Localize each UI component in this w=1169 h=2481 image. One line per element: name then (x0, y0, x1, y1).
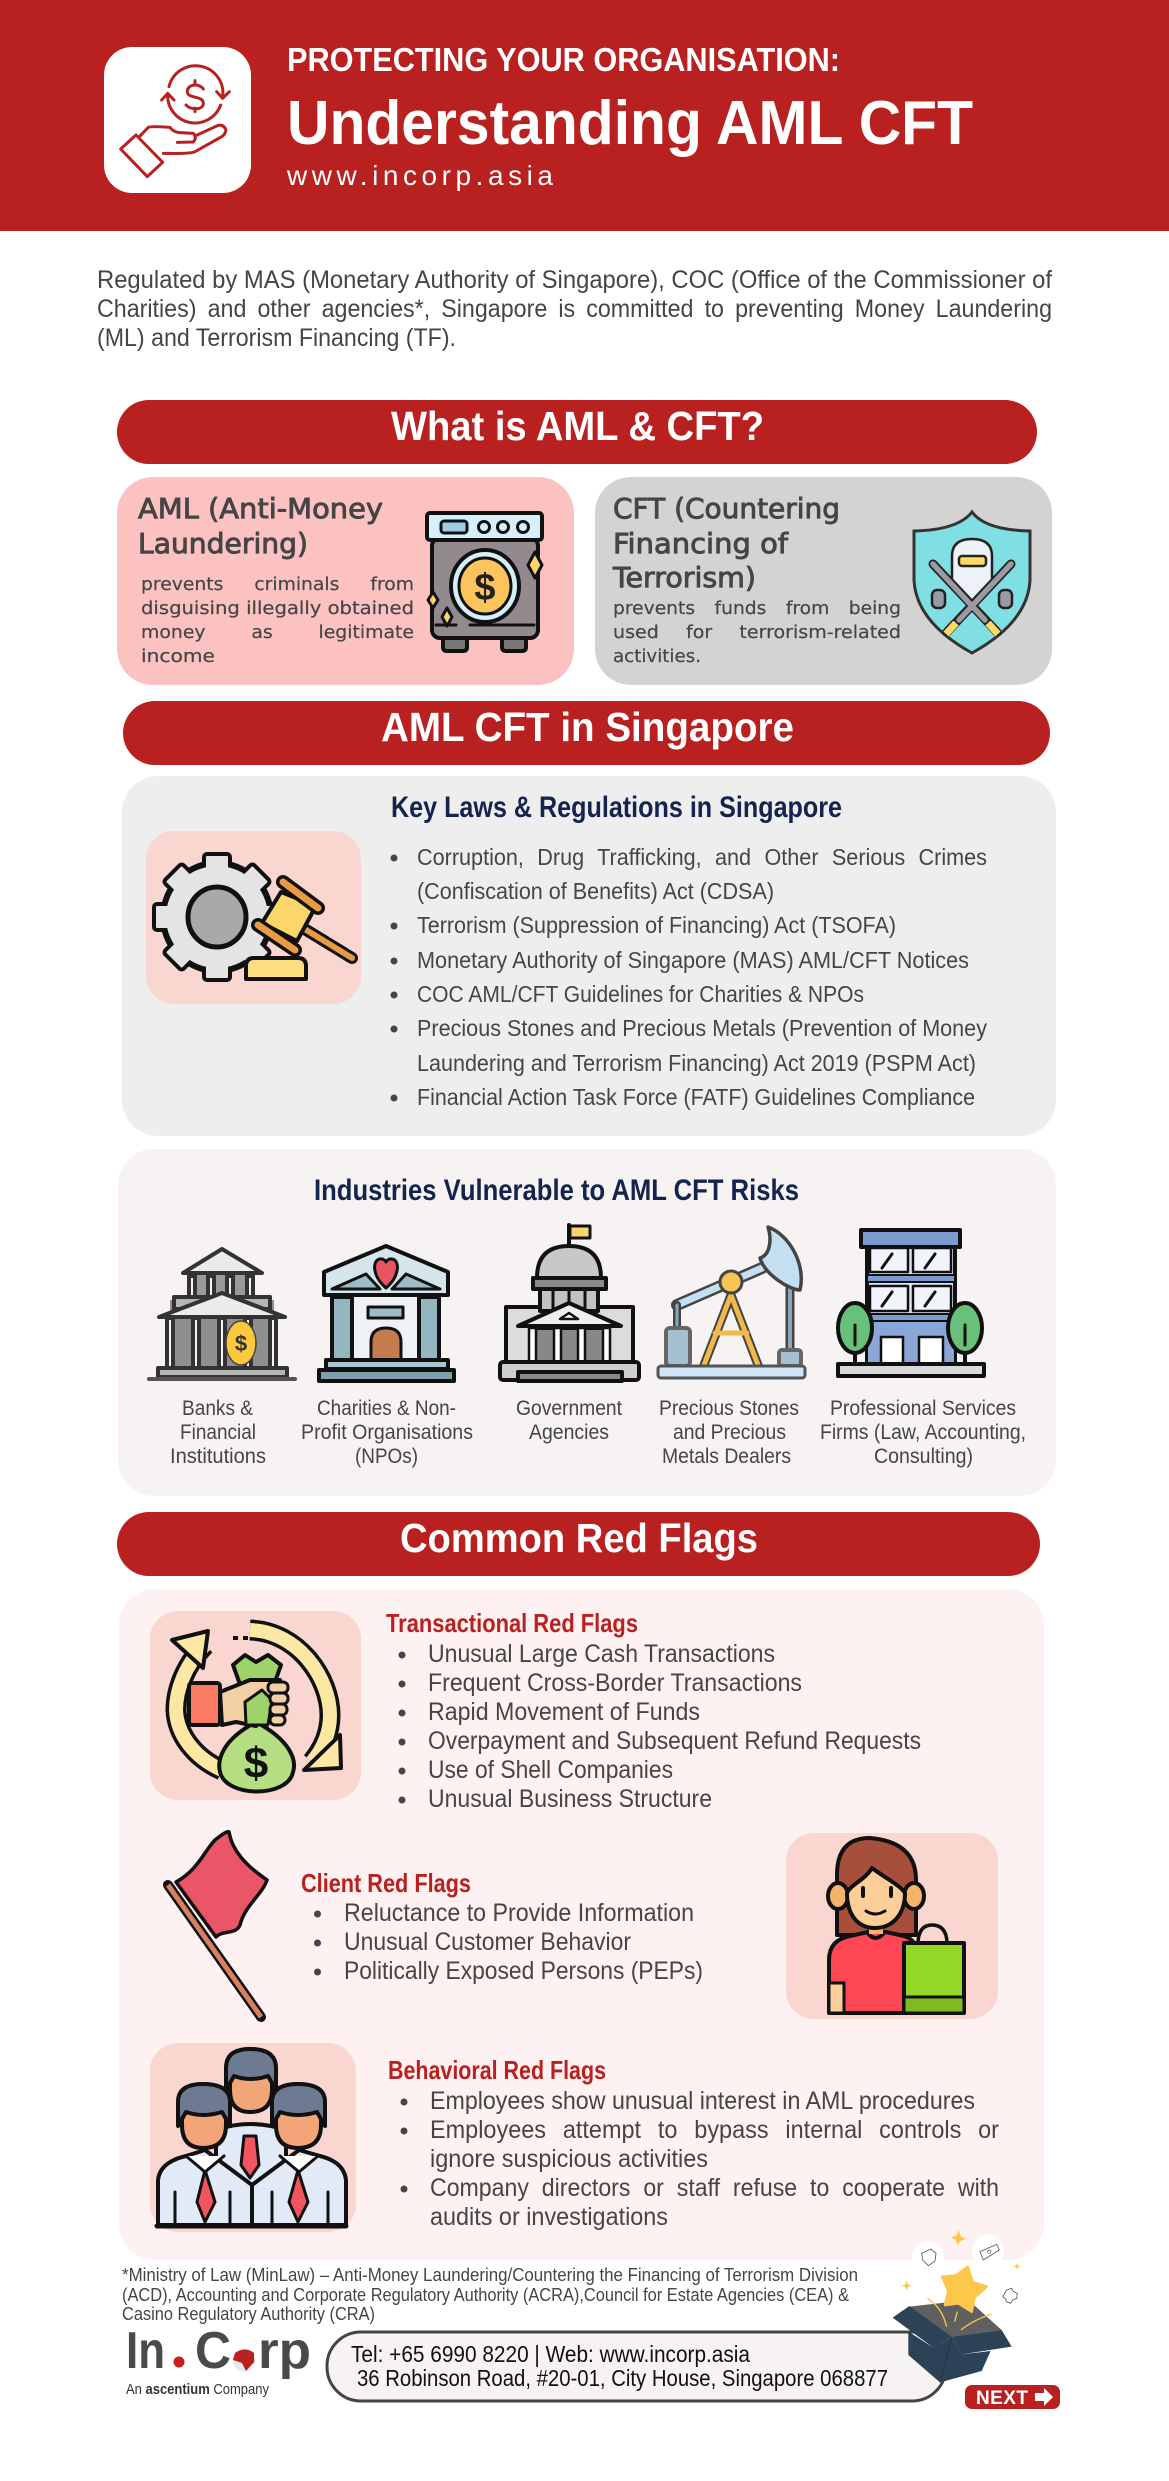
footnote (122, 2265, 858, 2324)
label: precious stones (659, 1397, 799, 1468)
icon: client with shopping bag (786, 1833, 998, 2019)
icon: money bag with arrows: $ (244, 1739, 268, 1788)
panel: key laws and regulations (122, 776, 1056, 1136)
icon: oil pump (658, 1227, 805, 1378)
AML description: income (141, 646, 215, 667)
bullet list: laws: Terrorism (Suppression of Financing) Act (TSOFA) (417, 912, 896, 938)
label: government (516, 1397, 622, 1444)
bullet list: client: Reluctance to Provide Information (344, 1899, 694, 1927)
label: government: Agencies (529, 1421, 609, 1444)
transactional red flags (386, 1608, 921, 1813)
icon: team of employees (150, 2043, 356, 2232)
bullet list: transactional: Frequent Cross-Border Transactions (428, 1669, 802, 1697)
header kicker: PROTECTING YOUR ORGANISATION: (287, 41, 840, 78)
bullet list: laws (390, 844, 987, 1110)
heading: Common Red Flags: Common Red Flags (400, 1515, 758, 1561)
label: banks (170, 1397, 266, 1468)
footnote: (ACD), Accounting and Corporate Regulatory Authority (ACRA),Council for Estate Agencies (CEA) & (122, 2285, 849, 2305)
icon: money bag with arrows (150, 1611, 361, 1800)
icon: globe (232, 2348, 256, 2372)
label: government: Government (516, 1397, 622, 1420)
heading: AML CFT in Singapore (123, 701, 1050, 765)
label: banks: Financial (180, 1421, 256, 1444)
AML description: prevents criminals from (141, 574, 414, 595)
website: www.incorp.asia (286, 160, 553, 191)
bullet list: behavioral: ignore suspicious activities (430, 2145, 708, 2173)
CFT description (613, 598, 901, 667)
bullet list: client: Politically Exposed Persons (PEPs) (344, 1957, 703, 1985)
bullet list: laws: COC AML/CFT Guidelines for Charities & NPOs (417, 981, 864, 1007)
industry labels (170, 1397, 1026, 1468)
bullet list: transactional: Rapid Movement of Funds (428, 1698, 700, 1726)
heading: AML CFT in Singapore: AML CFT in Singapore (381, 704, 794, 750)
heading: What is AML & CFT: What is AML & CFT? (391, 403, 764, 449)
icon: washing machine with dollar (427, 513, 542, 651)
CFT title: CFT (Countering (613, 493, 840, 525)
bullet list: behavioral: Employees show unusual interest in AML procedures (430, 2087, 975, 2115)
next button (965, 2385, 1060, 2409)
panel: vulnerable industries (118, 1149, 1056, 1496)
client red flags: Client Red Flags (301, 1868, 471, 1898)
main title: Understanding AML CFT (287, 89, 973, 158)
label: professional services: Professional Services (830, 1397, 1016, 1420)
bullet list: laws: Financial Action Task Force (FATF) Guidelines Compliance (417, 1084, 975, 1110)
bullet list: behavioral: Company directors or staff refuse to cooperate with (430, 2174, 999, 2202)
bullet list: transactional: Unusual Large Cash Transactions (428, 1640, 775, 1668)
label: professional services: Consulting) (874, 1445, 973, 1468)
label: precious stones: Precious Stones (659, 1397, 799, 1420)
bullet list: transactional: Overpayment and Subsequent Refund Requests (428, 1727, 921, 1755)
icon: washing machine with dollar: $ (474, 567, 496, 609)
contact details: 36 Robinson Road, #20-01, City House, Singapore 068877 (357, 2365, 888, 2391)
label: banks: Institutions (170, 1445, 266, 1468)
panel: CFT definition (595, 477, 1052, 685)
icon: bank: $ (235, 1331, 247, 1356)
bullet list: laws: Monetary Authority of Singapore (MAS) AML/CFT Notices (417, 947, 969, 973)
AML title (138, 493, 383, 560)
arrow (1035, 2388, 1053, 2406)
AML description (141, 574, 414, 667)
bullet list: laws: (Confiscation of Benefits) Act (CDSA) (417, 878, 774, 904)
bullet list: laws: Corruption, Drug Trafficking, and Other Serious Crimes (417, 844, 987, 870)
bullet list: behavioral (400, 2087, 999, 2231)
icon: bank (149, 1249, 295, 1379)
panel heading: Key Laws & Regulations in Singapore (391, 791, 842, 824)
InCorp logo: In (126, 2322, 165, 2380)
contact details: Tel: +65 6990 8220 | Web: www.incorp.asia (351, 2341, 750, 2367)
contact pill (327, 2332, 946, 2401)
panel: AML definition (117, 477, 574, 685)
CFT description: activities. (613, 646, 701, 667)
AML description: disguising illegally obtained (141, 598, 414, 619)
InCorp logo (126, 2322, 311, 2398)
InCorp logo: C (195, 2322, 231, 2380)
icon: charity building (319, 1246, 454, 1381)
bullet list: laws: Laundering and Terrorism Financing) Act 2019 (PSPM Act) (417, 1050, 976, 1076)
CFT description: used for terrorism-related (613, 622, 901, 643)
icon: government dome (500, 1225, 639, 1381)
contact details (351, 2341, 888, 2391)
AML title: Laundering) (138, 528, 308, 560)
panel: red flags (119, 1589, 1044, 2260)
next button: NEXT (976, 2388, 1028, 2409)
label: charities: Charities & Non- (317, 1397, 456, 1420)
bullet list: transactional (398, 1640, 921, 1813)
bullet list: behavioral: Employees attempt to bypass internal controls or (430, 2116, 999, 2144)
label: charities: Profit Organisations (301, 1421, 473, 1444)
behavioral red flags: Behavioral Red Flags (388, 2055, 606, 2085)
behavioral red flags (388, 2055, 999, 2231)
label: professional services: Firms (Law, Accounting, (820, 1421, 1026, 1444)
icon: open box with star (893, 2230, 1021, 2382)
label: charities (301, 1397, 473, 1468)
bullet list: client (314, 1899, 703, 1985)
bullet list: laws: Precious Stones and Precious Metals (Prevention of Money (417, 1015, 987, 1041)
label: banks: Banks & (182, 1397, 253, 1420)
icon: office building (838, 1230, 984, 1376)
icon: gear and gavel (146, 831, 361, 1004)
InCorp logo: rp (258, 2322, 311, 2380)
intro paragraph: Charities) and other agencies*, Singapore is committed to preventing Money Laundering (97, 295, 1052, 323)
AML description: money as legitimate (141, 622, 414, 643)
InCorp logo: An ascentium Company (126, 2381, 269, 2398)
label: charities: (NPOs) (355, 1445, 418, 1468)
AML title: AML (Anti-Money (138, 493, 383, 525)
label: precious stones: Metals Dealers (662, 1445, 791, 1468)
icon: shield with crossed rifles (914, 512, 1030, 653)
bullet list: behavioral: audits or investigations (430, 2203, 668, 2231)
intro paragraph: Regulated by MAS (Monetary Authority of Singapore), COC (Office of the Commissioner of (97, 266, 1052, 294)
bullet list: transactional: Unusual Business Structure (428, 1785, 712, 1813)
CFT title: Financing of (613, 528, 789, 560)
heading: Common Red Flags (117, 1512, 1040, 1576)
CFT title: Terrorism) (612, 562, 756, 594)
footnote: Casino Regulatory Authority (CRA) (122, 2304, 375, 2324)
panel heading: Industries Vulnerable to AML CFT Risks (314, 1174, 799, 1207)
intro paragraph (97, 266, 1052, 352)
label: professional services (820, 1397, 1026, 1468)
icon: red flag (168, 1832, 267, 2017)
label: precious stones: and Precious (673, 1421, 786, 1444)
icon: hand with circulating dollar (104, 47, 251, 193)
CFT description: prevents funds from being (613, 598, 901, 619)
CFT title (612, 493, 840, 594)
bullet list: client: Unusual Customer Behavior (344, 1928, 631, 1956)
intro paragraph: (ML) and Terrorism Financing (TF). (97, 324, 456, 352)
heading: What is AML & CFT (117, 400, 1037, 464)
bullet list: transactional: Use of Shell Companies (428, 1756, 673, 1784)
transactional red flags: Transactional Red Flags (386, 1608, 638, 1638)
header band (0, 0, 1169, 231)
client red flags (301, 1868, 703, 1985)
footnote: *Ministry of Law (MinLaw) – Anti-Money Laundering/Countering the Financing of Terrorism Division (122, 2265, 858, 2285)
